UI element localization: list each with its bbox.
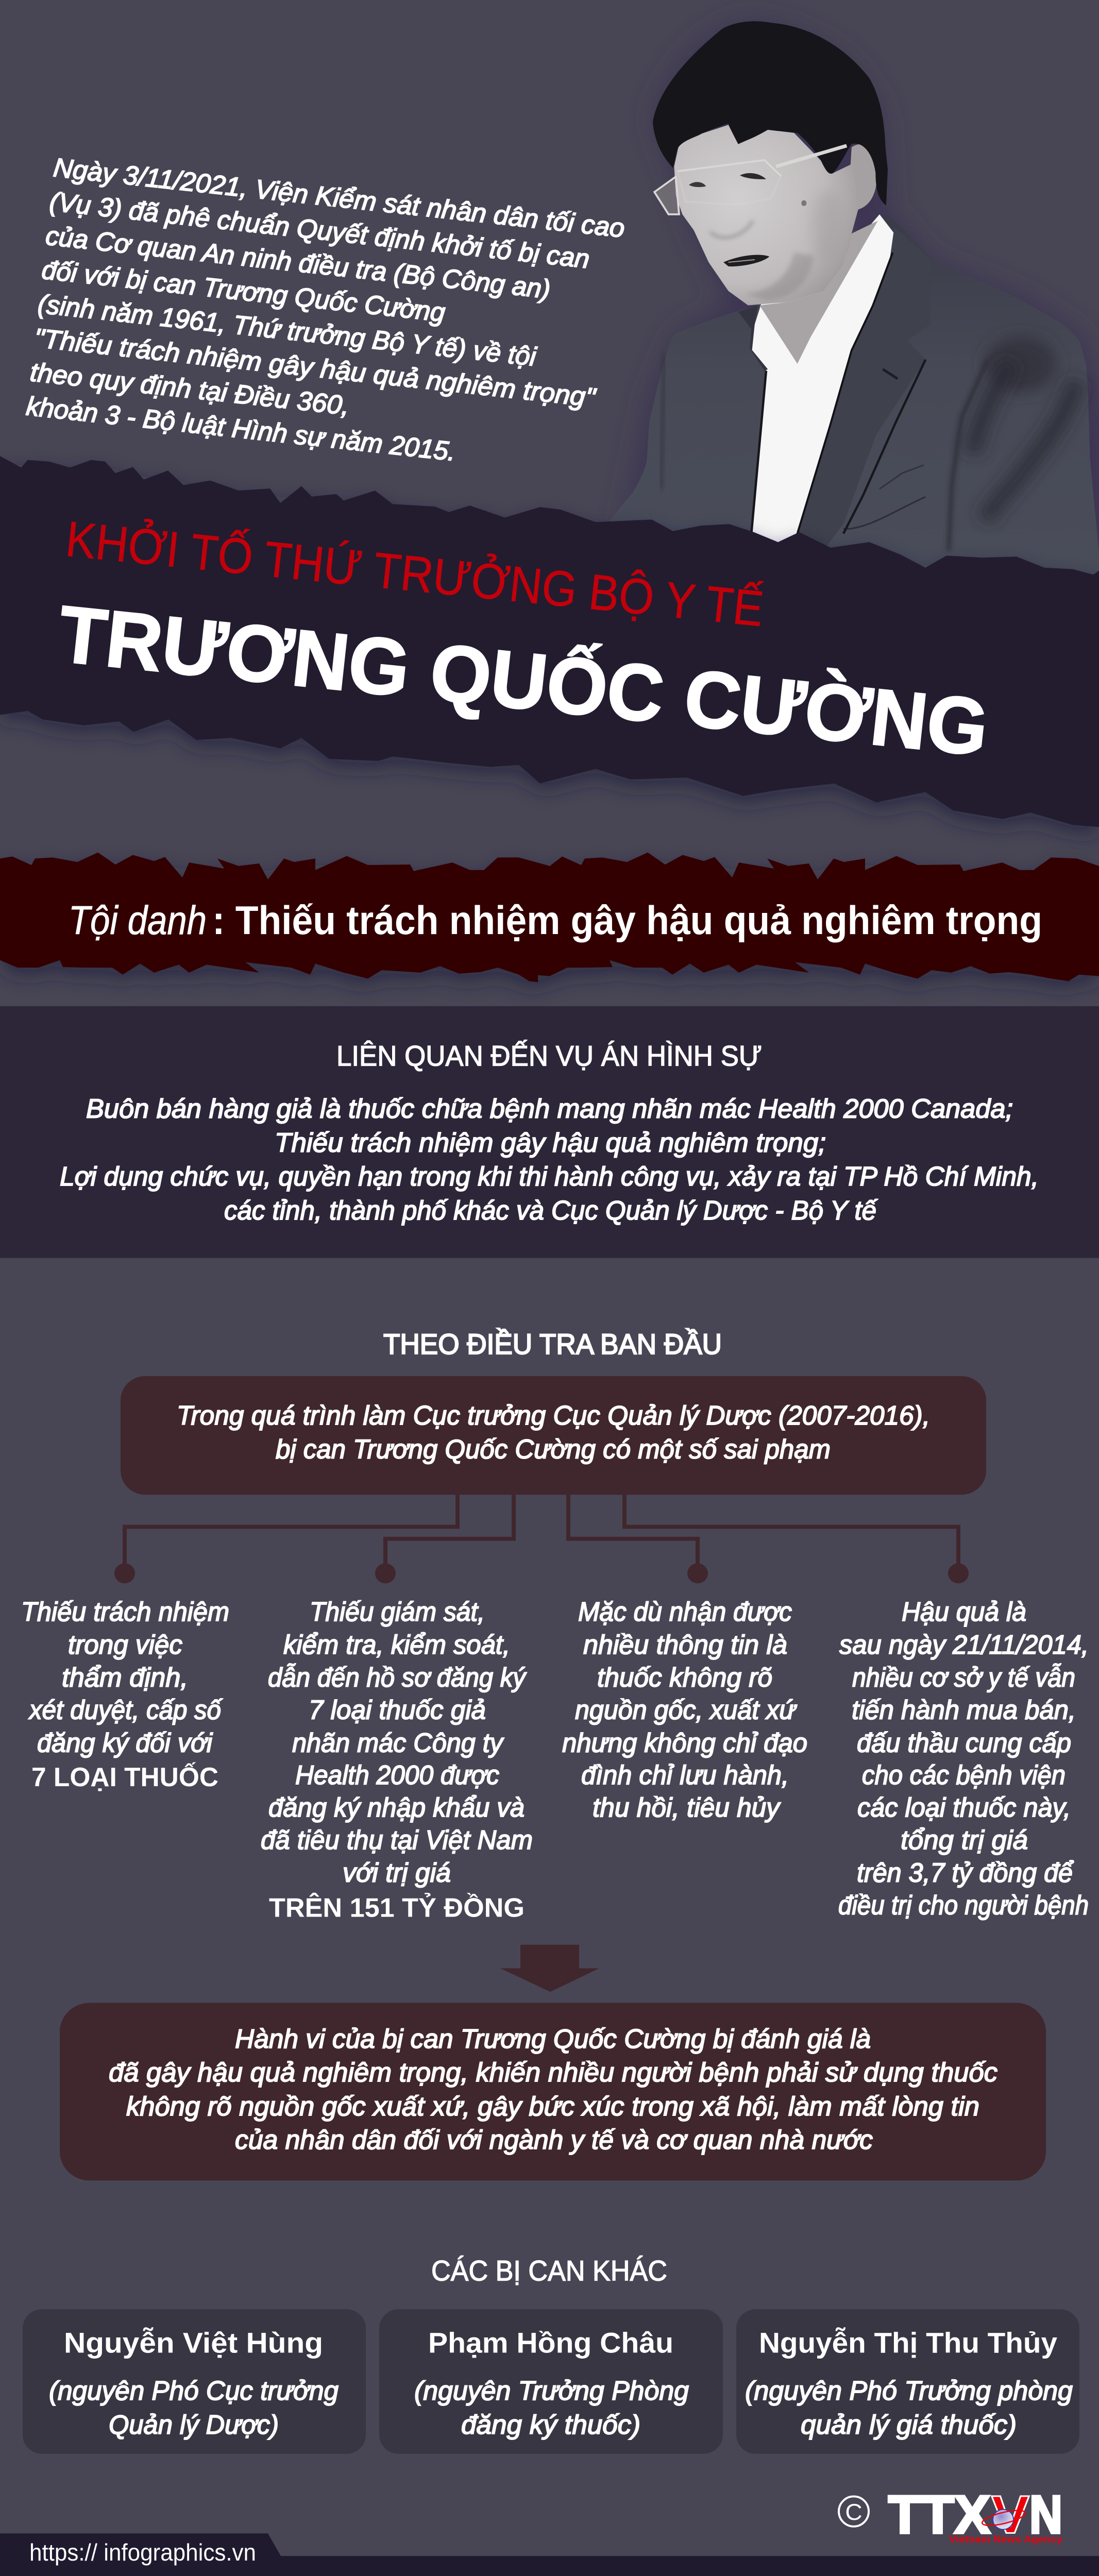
column 1: negligence: thẩm định,	[62, 1663, 188, 1692]
eyes and mouth	[689, 173, 769, 266]
column 2: lack of supervision: Health 2000 được	[295, 1761, 499, 1790]
heading: LIÊN QUAN ĐẾN VỤ ÁN HÌNH SỰ	[336, 1040, 762, 1072]
card: Phạm Hồng Châu	[379, 2309, 723, 2454]
column 4: consequences: Hậu quả là	[902, 1598, 1026, 1627]
footer bar with URL: https:// infographics.vn	[29, 2539, 256, 2566]
photo: portrait of Trương Quốc Cường	[603, 20, 1099, 617]
paragraph	[60, 1094, 1039, 1226]
column 2: lack of supervision: TRÊN 151 TỶ ĐỒNG	[269, 1893, 525, 1923]
card: Nguyễn Thị Thu Thủy: quản lý giá thuốc)	[801, 2411, 1017, 2440]
intro text block: đối với bị can Trương Quốc Cường	[40, 255, 447, 328]
intro text block: "Thiếu trách nhiệm gây hậu quả nghiêm trọng"	[32, 324, 598, 413]
card: Nguyễn Việt Hùng	[23, 2309, 366, 2454]
column 4: consequences: tổng trị giá	[901, 1826, 1028, 1855]
column 1: negligence: Thiếu trách nhiệm	[21, 1598, 229, 1627]
paragraph: Lợi dụng chức vụ, quyền hạn trong khi thi hành công vụ, xảy ra tại TP Hồ Chí Minh,	[60, 1162, 1039, 1192]
intro text block: Ngày 3/11/2021, Viện Kiểm sát nhân dân tối cao	[52, 153, 626, 244]
callout: assessment: không rõ nguồn gốc xuất xứ, gây bức xúc trong xã hội, làm mất lòng tin	[126, 2092, 979, 2122]
column 3: ignored information: thuốc không rõ	[597, 1663, 772, 1692]
heading: other accused: CÁC BỊ CAN KHÁC	[431, 2255, 667, 2287]
card: Nguyễn Thị Thu Thủy: Nguyễn Thị Thu Thủy	[759, 2327, 1057, 2359]
globe	[981, 2507, 1026, 2530]
paragraph: các tỉnh, thành phố khác và Cục Quản lý Dược - Bộ Y tế	[224, 1196, 878, 1226]
column 2: lack of supervision: dẫn đến hồ sơ đăng ký	[268, 1663, 527, 1692]
column 1: negligence: 7 LOẠI THUỐC	[31, 1762, 218, 1792]
column 1: negligence: đăng ký đối với	[37, 1728, 213, 1758]
face	[674, 125, 858, 306]
column 3: ignored information: Mặc dù nhận được	[578, 1598, 792, 1627]
card: Nguyễn Việt Hùng: Quản lý Dược)	[109, 2411, 279, 2440]
column 3: ignored information: nhưng không chỉ đạo	[562, 1728, 807, 1758]
callout: assessment: đã gây hậu quả nghiêm trọng, khiến nhiều người bệnh phải sử dụng thuốc	[109, 2058, 997, 2088]
red subtitle: KHỞI TỐ THỨ TRƯỞNG BỘ Y TẾ	[63, 511, 766, 637]
paragraph: Buôn bán hàng giả là thuốc chữa bệnh mang nhãn mác Health 2000 Canada;	[86, 1094, 1013, 1124]
ear	[848, 144, 877, 210]
callout: assessment: Hành vi của bị can Trương Quốc Cường bị đánh giá là	[235, 2025, 871, 2054]
callout: role summary	[121, 1376, 986, 1495]
arrow: down	[500, 1945, 599, 1992]
connector lines and dots	[114, 1495, 969, 1583]
charge line: : Thiếu trách nhiệm gây hậu quả nghiêm trọng	[212, 898, 1042, 943]
column 4: consequences: cho các bệnh viện	[862, 1761, 1066, 1790]
column 4: consequences	[838, 1598, 1089, 1920]
column 4: consequences: nhiều cơ sở y tế vẫn	[852, 1663, 1075, 1692]
column 1: negligence: trong việc	[68, 1631, 182, 1660]
wordmark: N	[1029, 2485, 1062, 2545]
torn dark title band	[0, 456, 1099, 827]
card: Nguyễn Thị Thu Thủy	[736, 2309, 1079, 2454]
hair	[653, 21, 888, 206]
intro text block: (Vụ 3) đã phê chuẩn Quyết định khởi tố bị can	[48, 187, 591, 274]
column 4: consequences: đấu thầu cung cấp	[857, 1728, 1071, 1758]
column 3: ignored information: đình chỉ lưu hành,	[581, 1761, 789, 1790]
callout: role summary: Trong quá trình làm Cục trưởng Cục Quản lý Dược (2007-2016),	[177, 1401, 930, 1431]
intro text block	[25, 153, 626, 482]
column 2: lack of supervision: kiểm tra, kiểm soát,	[283, 1631, 510, 1660]
agency name: Vietnam News Agency	[949, 2534, 1062, 2545]
column 3: ignored information: nguồn gốc, xuất xứ	[575, 1696, 798, 1725]
torn red charge band	[0, 853, 1099, 982]
copyright mark	[839, 2497, 869, 2527]
column 1: negligence	[21, 1598, 229, 1792]
paragraph: Thiếu trách nhiệm gây hậu quả nghiêm trọng;	[275, 1128, 826, 1158]
card: Phạm Hồng Châu: đăng ký thuốc)	[461, 2411, 640, 2440]
callout: role summary: bị can Trương Quốc Cường có một số sai phạm	[276, 1435, 831, 1464]
neck	[759, 221, 878, 364]
glasses	[654, 146, 847, 214]
logo: TTXVN	[839, 2485, 1062, 2545]
column 4: consequences: tiến hành mua bán,	[852, 1696, 1076, 1725]
card: Phạm Hồng Châu: (nguyên Trưởng Phòng	[414, 2377, 689, 2406]
card: Nguyễn Thị Thu Thủy: (nguyên Phó Trưởng phòng	[745, 2377, 1073, 2406]
column 2: lack of supervision: Thiếu giám sát,	[310, 1598, 485, 1627]
wordmark: V	[991, 2485, 1029, 2545]
intro text block: của Cơ quan An ninh điều tra (Bộ Công an)	[44, 221, 552, 304]
column 2: lack of supervision: với trị giá	[343, 1858, 451, 1888]
heading: initial investigation: THEO ĐIỀU TRA BAN ĐẦU	[383, 1328, 722, 1360]
card: Phạm Hồng Châu: Phạm Hồng Châu	[428, 2327, 673, 2359]
shirt	[750, 214, 894, 585]
intro text block: theo quy định tại Điều 360,	[29, 358, 351, 421]
callout: assessment	[60, 2003, 1046, 2180]
column 2: lack of supervision: đăng ký nhập khẩu và	[268, 1793, 525, 1823]
panel: related criminal case	[0, 1006, 1099, 1258]
card: Nguyễn Việt Hùng: (nguyên Phó Cục trưởng	[49, 2377, 339, 2406]
column 4: consequences: sau ngày 21/11/2014,	[839, 1631, 1089, 1660]
column 4: consequences: các loại thuốc này,	[857, 1793, 1071, 1823]
column 4: consequences: trên 3,7 tỷ đồng để	[857, 1858, 1074, 1888]
column 2: lack of supervision: nhãn mác Công ty	[292, 1728, 504, 1758]
charge line: Tội danh	[69, 898, 207, 943]
jacket	[603, 214, 1099, 617]
callout: assessment: của nhân dân đối với ngành y tế và cơ quan nhà nước	[235, 2126, 873, 2155]
column 2: lack of supervision: 7 loại thuốc giả	[309, 1696, 486, 1725]
main title: TRƯƠNG QUỐC CƯỜNG	[54, 589, 992, 773]
wordmark	[888, 2485, 1062, 2545]
card: Nguyễn Việt Hùng: Nguyễn Việt Hùng	[64, 2327, 323, 2359]
column 2: lack of supervision: đã tiêu thụ tại Việt Nam	[261, 1826, 533, 1855]
column 1: negligence: xét duyệt, cấp số	[28, 1696, 223, 1725]
wordmark: TTX	[888, 2485, 990, 2545]
column 2: lack of supervision	[261, 1598, 533, 1923]
intro text block: (sinh năm 1961, Thứ trưởng Bộ Y tế) về tội	[37, 290, 538, 372]
face shading	[711, 189, 845, 300]
right lapel	[798, 227, 931, 585]
footer bar with URL	[0, 2533, 1099, 2576]
column 3: ignored information: thu hồi, tiêu hủy	[593, 1793, 781, 1823]
column 3: ignored information	[562, 1598, 807, 1823]
copyright mark: C	[845, 2499, 863, 2525]
intro text block: khoản 3 - Bộ luật Hình sự năm 2015.	[25, 392, 457, 467]
column 3: ignored information: nhiều thông tin là	[583, 1631, 787, 1660]
jacket folds	[661, 336, 1077, 551]
left lapel	[738, 306, 768, 371]
